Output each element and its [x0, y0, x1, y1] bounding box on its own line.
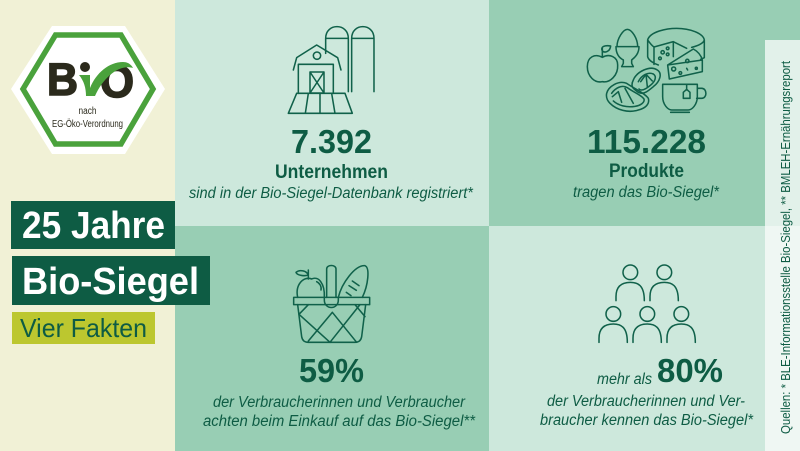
logo caption: EG-Öko-Verordnung — [52, 118, 123, 130]
subtitle: Vier Fakten: Vier Fakten — [20, 313, 147, 343]
number: 59%: 59% — [299, 352, 364, 389]
heading: Unternehmen: Unternehmen — [275, 162, 388, 183]
number: more than 80%: mehr als — [597, 371, 652, 388]
icon: shopping basket — [294, 265, 370, 342]
logo caption — [52, 106, 123, 130]
panel: sources strip — [765, 40, 800, 451]
panel: Unternehmen — [175, 0, 489, 226]
icon: farm with barn and silos — [288, 27, 374, 113]
title: 25 Jahre: 25 Jahre — [22, 205, 165, 247]
heading: Produkte: Produkte — [609, 161, 684, 182]
text: sources: Quellen: * BLE-Informationsstelle Bio-Siegel, ** BMLEH-Ernährungsreport — [779, 61, 793, 434]
text: consumers know the seal — [540, 393, 754, 429]
text: consumers pay attention: der Verbraucherinnen und Verbraucher — [213, 394, 466, 411]
panel: Produkte — [489, 0, 800, 226]
logo wordmark: B — [47, 54, 78, 105]
icon: group of people — [599, 265, 695, 342]
number: more than 80% — [597, 352, 723, 389]
number: 115.228: 115.228 — [587, 123, 706, 160]
left panel background — [0, 0, 175, 451]
icon: organic foods — [587, 28, 706, 112]
panel: 59 percent — [175, 226, 489, 451]
text: consumers pay attention: achten beim Einkauf auf das Bio-Siegel** — [203, 413, 476, 430]
logo caption: nach — [78, 106, 96, 117]
logo wordmark — [47, 54, 134, 107]
text: consumers know the seal: der Verbraucherinnen und Ver- — [547, 393, 745, 410]
text: consumers pay attention — [203, 394, 476, 430]
logo: Bio-Siegel hexagon — [11, 26, 165, 154]
number: 7.392: 7.392 — [291, 123, 372, 160]
number: more than 80%: 80% — [657, 352, 723, 389]
text: registered in database: sind in der Bio-Siegel-Datenbank registriert* — [189, 185, 474, 202]
panel: 80 percent — [489, 226, 800, 451]
logo wordmark: O — [100, 56, 134, 107]
text: consumers know the seal: braucher kennen das Bio-Siegel* — [540, 412, 754, 429]
title: Bio-Siegel: Bio-Siegel — [22, 261, 199, 303]
text: carry the seal: tragen das Bio-Siegel* — [573, 184, 720, 201]
